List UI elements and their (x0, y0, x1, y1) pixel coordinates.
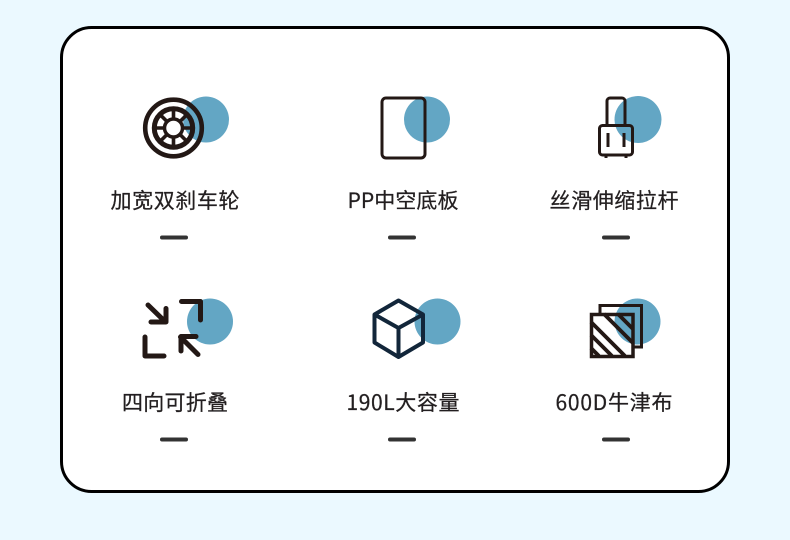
label: telescopic handle: 丝滑伸缩拉杆 (550, 185, 678, 215)
dash (160, 236, 188, 240)
label: wheel: 加宽双刹车轮 (110, 185, 240, 215)
label: folding: 四向可折叠 (122, 387, 228, 417)
icon: folding arrows (145, 298, 233, 356)
panel: feature card (62, 28, 728, 492)
feature: telescopic handle (550, 96, 678, 240)
icon: fabric squares (591, 298, 660, 356)
label: capacity: 190L大容量 (346, 387, 460, 417)
feature: fabric (556, 298, 672, 442)
feature: base board (348, 96, 458, 240)
feature: wheel (110, 96, 240, 240)
feature: capacity (346, 298, 460, 442)
dash (388, 236, 416, 240)
dash (602, 236, 630, 240)
dash (388, 438, 416, 442)
icon: wheel (145, 96, 229, 156)
feature: folding (122, 298, 233, 442)
dash (160, 438, 188, 442)
icon: base board (382, 96, 450, 158)
icon: cube (374, 298, 460, 357)
dash (602, 438, 630, 442)
label: base board: PP中空底板 (348, 185, 458, 215)
icon: luggage (600, 96, 662, 158)
label: fabric: 600D牛津布 (556, 387, 672, 417)
